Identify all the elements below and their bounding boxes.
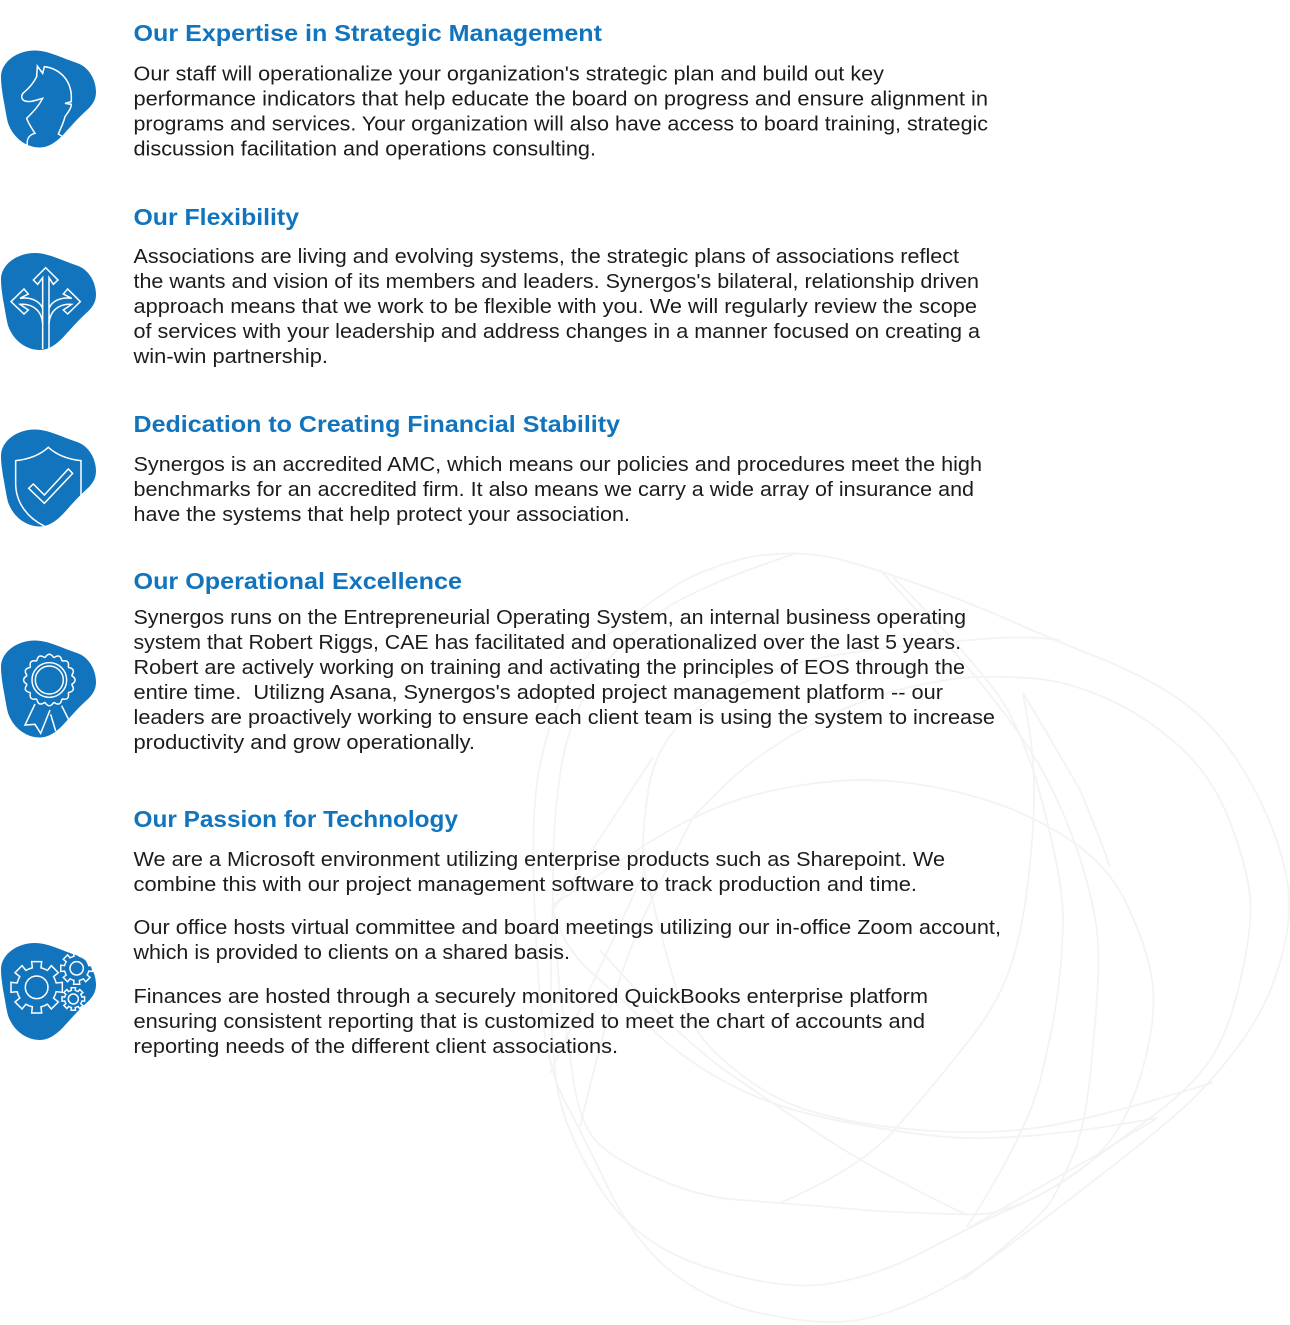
text block: Associations are living and evolving systems, the strategic plans of associations reflect [134,245,959,268]
text block [134,453,982,526]
text block: the wants and vision of its members and leaders. Synergos's bilateral, relationship driven [134,270,979,293]
text block: productivity and grow operationally. [134,731,475,754]
text block: programs and services. Your organization will also have access to board training, strategic [134,113,988,136]
text block: performance indicators that help educate the board on progress and ensure alignment in [134,88,988,111]
text block: Synergos is an accredited AMC, which means our policies and procedures meet the high [134,453,982,476]
panel: technology [1,806,1001,1058]
text block: benchmarks for an accredited firm. It also means we carry a wide array of insurance and [134,478,974,501]
text block: leaders are proactively working to ensure each client team is using the system to increase [134,706,995,729]
text block: system that Robert Riggs, CAE has facilitated and operationalized over the last 5 years. [134,631,961,654]
icon: gears [1,943,96,1040]
panel: flexibility [1,204,981,368]
text block: finances [134,985,928,1058]
icon: branching arrows [1,253,96,350]
text block: win-win partnership. [132,345,328,368]
text block: Our staff will operationalize your organization's strategic plan and build out key [134,63,885,86]
text block: virtual meetings: which is provided to clients on a shared basis. [132,941,570,964]
text block: Synergos runs on the Entrepreneurial Operating System, an internal business operating [134,606,966,629]
text block: have the systems that help protect your association. [134,503,630,526]
text block [134,63,988,161]
text block: entire time. Utilizng Asana, Synergos's adopted project management platform -- our [134,681,943,704]
text block: finances: ensuring consistent reporting that is customized to meet the chart of accounts and [134,1010,925,1033]
heading: Our Flexibility [134,204,299,230]
text block [134,606,995,754]
text block: finances: Finances are hosted through a securely monitored QuickBooks enterprise platform [134,985,928,1008]
text block: of services with your leadership and address changes in a manner focused on creating a [134,320,981,343]
panel: operational excellence [1,568,995,754]
text block: virtual meetings: Our office hosts virtual committee and board meetings utilizing our in-office Zoom account, [134,916,1001,939]
text block: Robert are actively working on training and activating the principles of EOS through the [134,656,965,679]
background: decorative line pattern [533,553,1289,1322]
text block: discussion facilitation and operations consulting. [134,138,596,161]
icon: shield with check mark [1,430,96,526]
heading: Our Expertise in Strategic Management [134,20,602,46]
text block: Microsoft environment: We are a Microsoft environment utilizing enterprise products such as Sharepoint. We [134,848,945,871]
panel: strategic management [1,20,988,161]
heading: Dedication to Creating Financial Stability [134,411,620,437]
text block: Microsoft environment: combine this with our project management software to track production and time. [134,873,917,896]
text block: approach means that we work to be flexible with you. We will regularly review the scope [134,295,977,318]
text block [132,245,981,368]
panel: financial stability [1,411,982,526]
text block: virtual meetings [132,916,1001,964]
icon: chess knight [1,50,96,148]
icon: award rosette [1,640,96,738]
heading: Our Passion for Technology [134,806,458,832]
text block: finances: reporting needs of the different client associations. [134,1035,618,1058]
text block: Microsoft environment [134,848,945,896]
heading: Our Operational Excellence [134,568,462,594]
